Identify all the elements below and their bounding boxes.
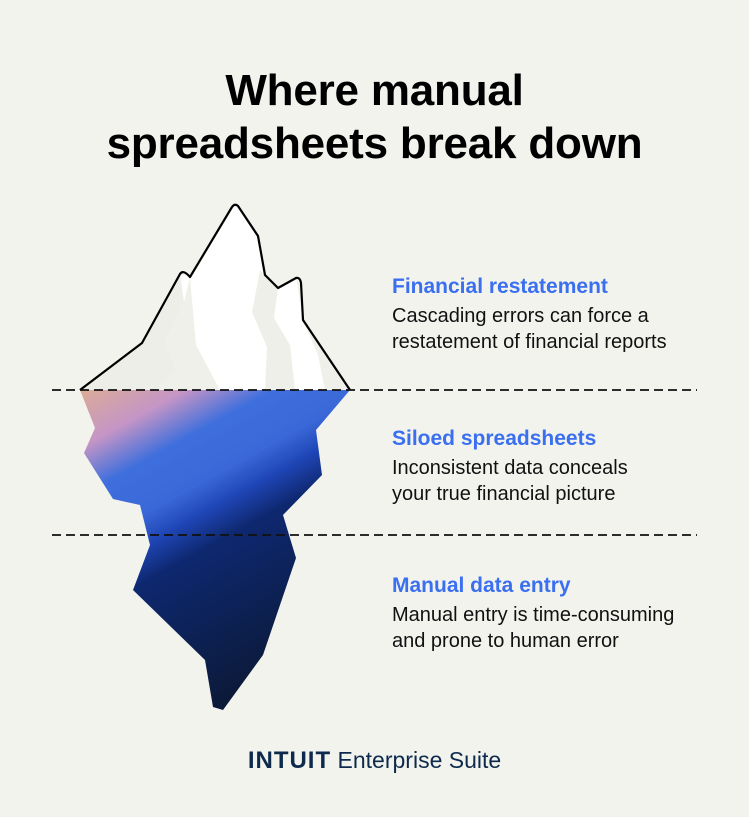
iceberg underwater [80,390,350,710]
text block: manual data entry: and prone to human error [392,630,619,652]
text block: financial restatement: Financial restatement [392,275,608,298]
title: spreadsheets break down [107,119,642,168]
title: Where manual [225,66,524,115]
text block: siloed spreadsheets: Siloed spreadsheets [392,427,596,450]
text block: siloed spreadsheets: your true financial picture [392,483,615,505]
text block: siloed spreadsheets: Inconsistent data conceals [392,457,628,479]
depth line dashed [52,534,697,536]
text block: manual data entry: Manual entry is time-consuming [392,604,674,626]
title [107,66,642,168]
waterline dashed [52,389,697,391]
iceberg tip [80,205,350,390]
text block: siloed spreadsheets [392,427,628,505]
text block: financial restatement: restatement of financial reports [392,331,667,353]
footer logo: INTUIT Enterprise Suite [248,747,501,774]
text block: financial restatement [392,275,667,353]
text block: financial restatement: Cascading errors can force a [392,305,649,327]
text block: manual data entry: Manual data entry [392,574,571,597]
text block: manual data entry [392,574,674,652]
